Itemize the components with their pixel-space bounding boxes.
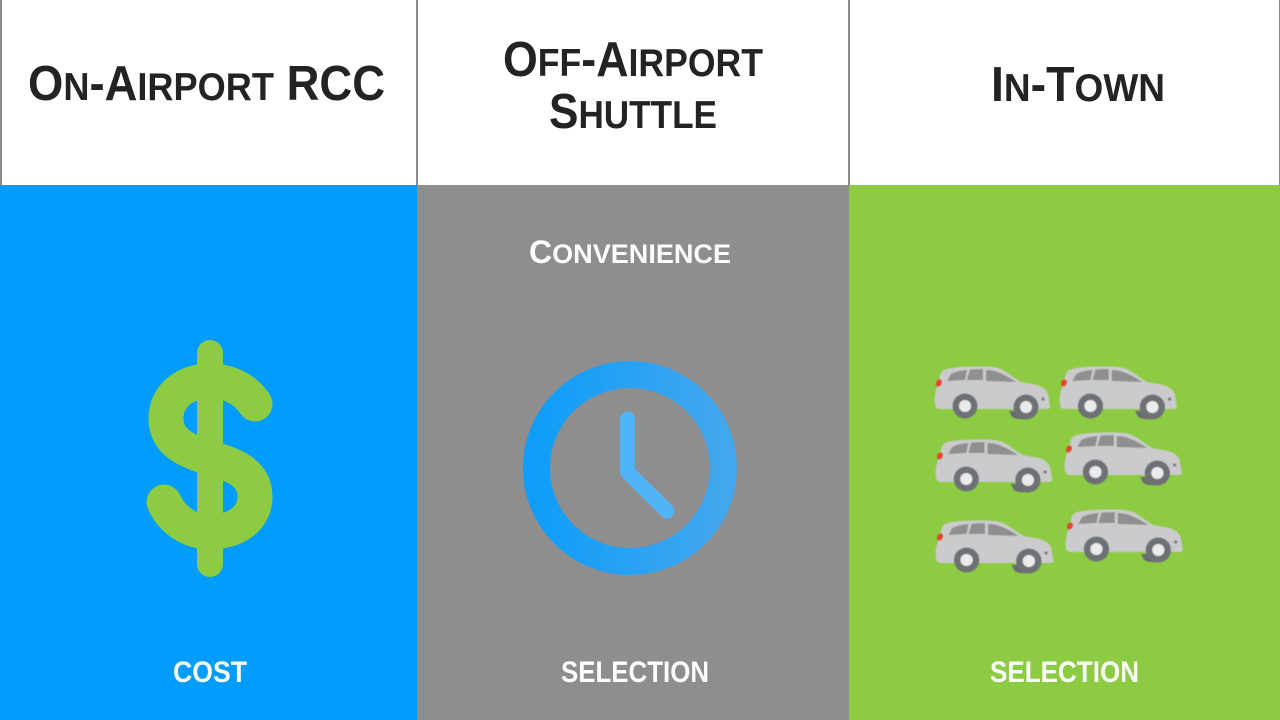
label: Convenience: CONVENIENCE <box>529 234 731 270</box>
label: Selection: SELECTION <box>990 656 1139 689</box>
green panel background <box>849 185 1280 720</box>
header cell: Off-Airport Shuttle <box>417 0 849 185</box>
panel: On-Airport RCC column <box>0 0 417 720</box>
header cell: In-Town <box>849 0 1280 185</box>
label: Cost: COST <box>173 656 247 689</box>
panel: Off-Airport Shuttle column <box>417 0 849 720</box>
panel: In-Town column <box>849 0 1280 720</box>
gray panel background <box>417 185 849 720</box>
icon: dollar sign <box>164 353 255 564</box>
icon: group of six cars <box>935 366 1183 574</box>
icon: car 1 <box>935 366 1050 420</box>
heading: On-Airport RCC: ON-AIRPORT RCC <box>28 57 385 111</box>
icon: car 4 <box>1065 432 1182 486</box>
label: Selection: SELECTION <box>561 656 709 689</box>
heading: In-Town: IN-TOWN <box>991 58 1165 112</box>
header cell: On-Airport RCC <box>0 0 417 185</box>
icon: car 5 <box>936 520 1053 574</box>
icon: car 6 <box>1066 509 1183 562</box>
icon: car 3 <box>936 439 1052 492</box>
heading: Shuttle: SHUTTLE <box>549 85 717 139</box>
icon: clock <box>536 374 724 562</box>
icon: car 2 <box>1060 366 1177 420</box>
blue panel background <box>0 185 417 720</box>
heading: Off-Airport: OFF-AIRPORT <box>503 33 763 87</box>
